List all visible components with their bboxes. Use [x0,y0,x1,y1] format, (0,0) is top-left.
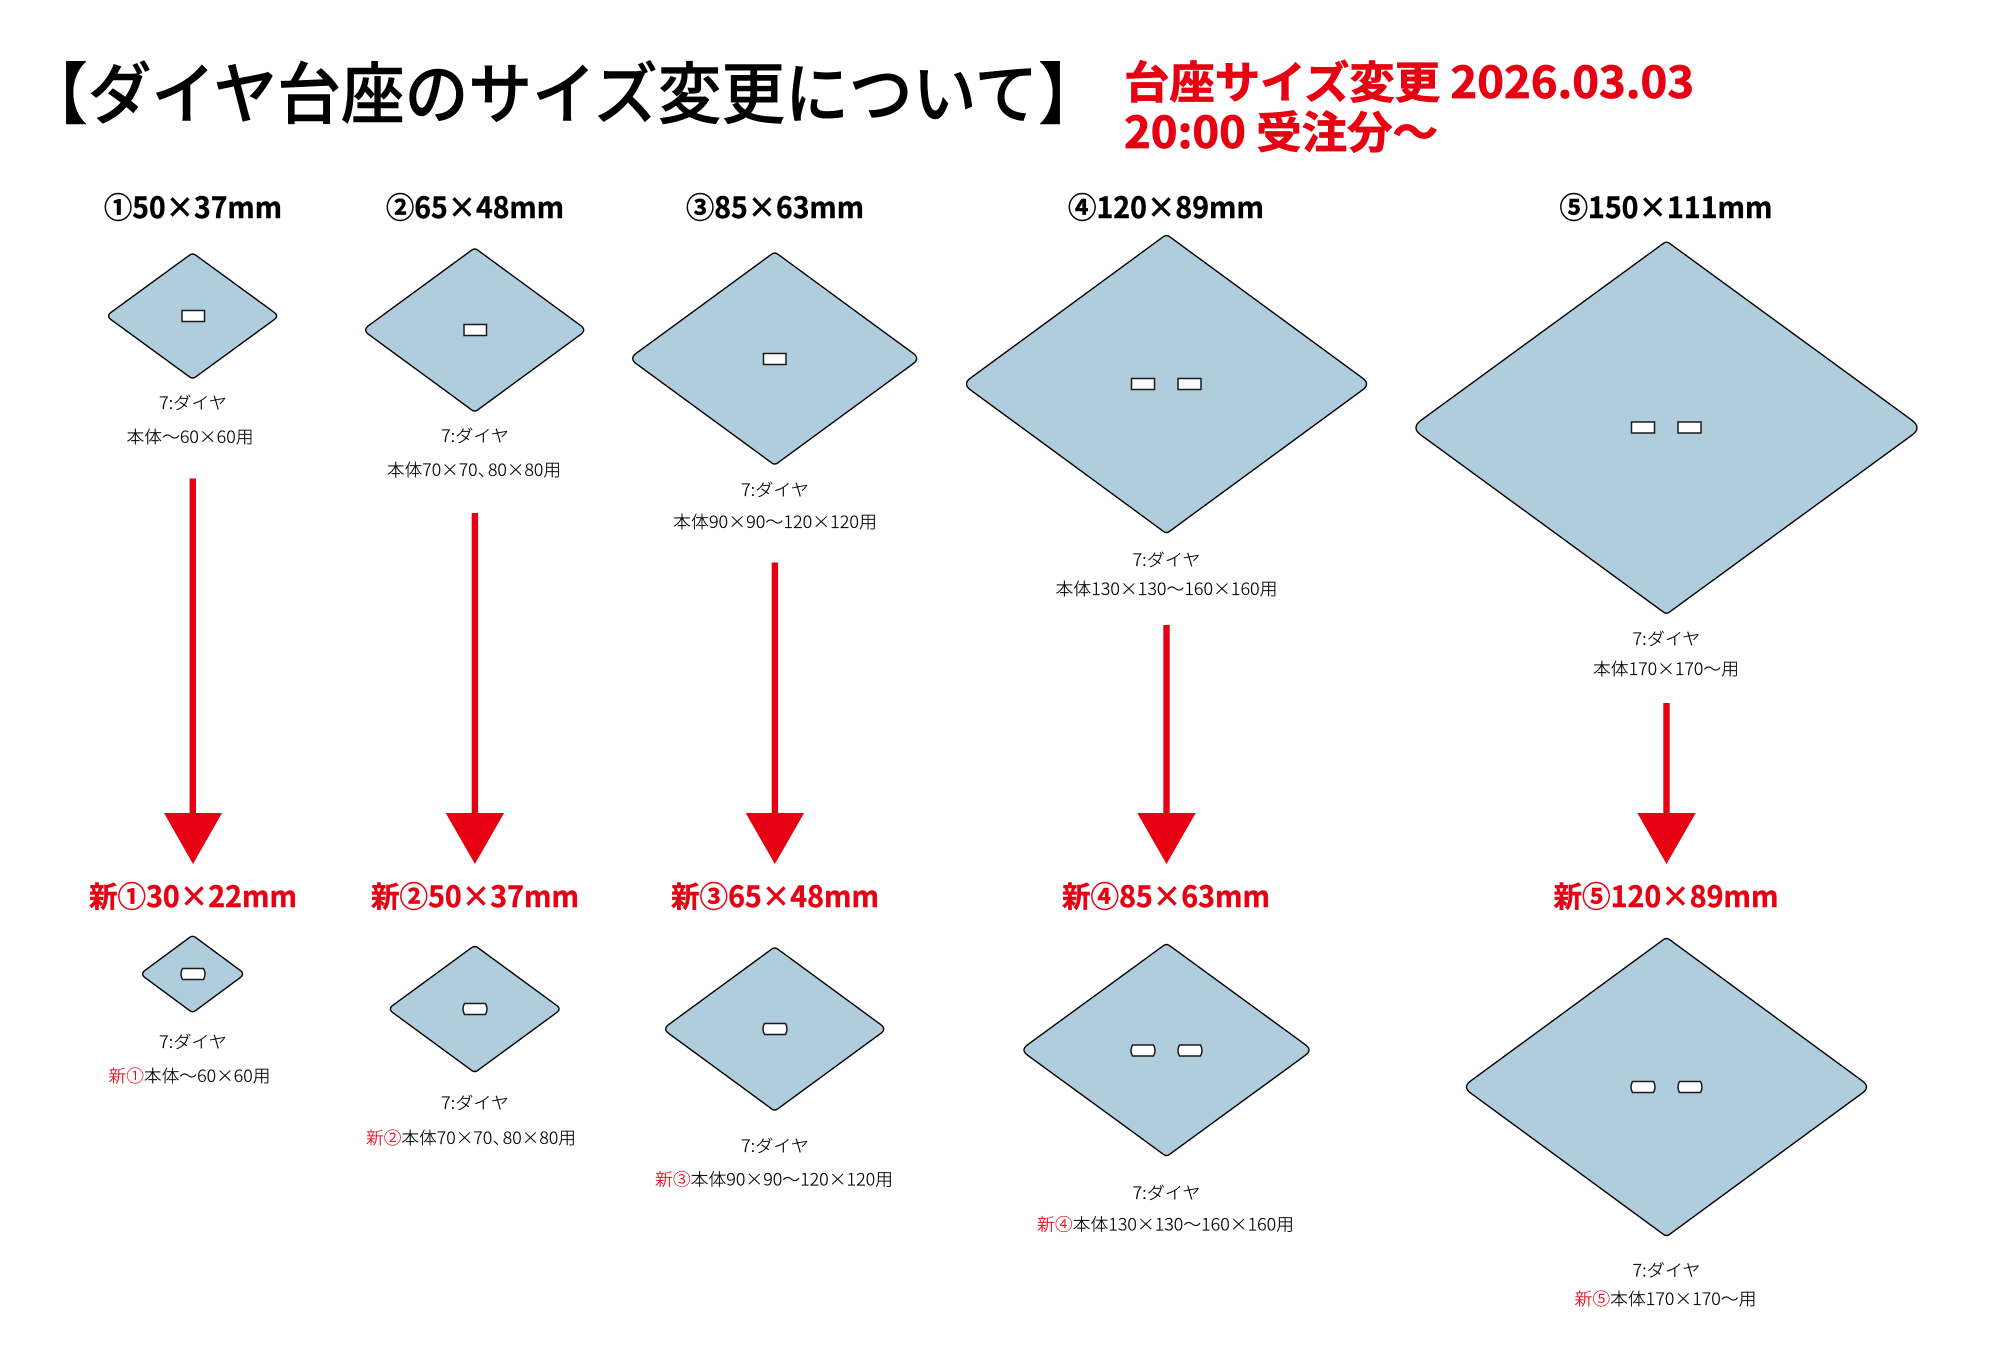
arrow 5 [1637,703,1696,864]
slot [181,968,205,980]
diamond base [966,236,1366,532]
heading: ④120×89mm [1068,185,1264,227]
diamond base [666,948,884,1110]
panel: new size 5 [1466,874,1866,1310]
label: 7:ダイヤ [1632,625,1700,650]
heading: 新①30×22mm [89,874,297,916]
diamond base [143,936,243,1012]
arrow 3 [746,562,804,864]
diamond base [366,249,584,411]
panel: new size 2 [366,874,579,1149]
label: 7:ダイヤ [441,1089,509,1114]
diamond base [1024,944,1309,1155]
slot [764,354,786,364]
heading: ①50×37mm [104,185,282,227]
slots [1131,1045,1202,1056]
label: 7:ダイヤ [741,476,809,501]
diamond base [390,946,559,1072]
panel: new size 4 [1024,874,1309,1236]
slot [182,310,204,322]
notice: effective date [1124,47,1694,161]
label: 7:ダイヤ [1632,1256,1700,1282]
size note: 新①本体～60×60用 [108,1062,270,1087]
heading: ⑤150×111mm [1560,185,1772,227]
label: 7:ダイヤ [741,1132,809,1157]
arrow 4 [1137,625,1196,864]
label: 7:ダイヤ [159,1028,227,1053]
size note: 本体～60×60用 [126,423,254,448]
size note: 新⑤本体170×170～用 [1574,1285,1756,1310]
size note: 本体70×70、80×80用 [387,456,561,481]
slot [763,1024,787,1034]
diamond base [109,254,277,378]
arrow 2 [446,513,504,864]
heading: 新⑤120×89mm [1554,874,1778,916]
label: 7:ダイヤ [1132,1179,1200,1204]
panel: current size 2 [366,185,584,481]
size note: 新③本体90×90～120×120用 [655,1166,893,1190]
slot [464,324,486,336]
slots [1631,1082,1702,1092]
panel: current size 5 [1416,185,1917,680]
title: 【ダイヤ台座のサイズ変更について】 [24,41,1102,138]
label: 7:ダイヤ [441,422,509,447]
slots [1632,422,1701,433]
diamond base [633,253,917,464]
panel: new size 3 [655,874,893,1190]
heading: 新③65×48mm [671,874,879,916]
diamond base [1416,242,1917,613]
heading: ③85×63mm [686,185,864,227]
slot [463,1004,487,1014]
size note: 本体90×90～120×120用 [673,508,877,533]
label: 7:ダイヤ [1132,546,1200,571]
panel: new size 1 [89,874,297,1087]
size note: 本体170×170～用 [1593,655,1739,680]
size note: 新②本体70×70、80×80用 [366,1124,576,1149]
panel: current size 4 [966,185,1366,600]
panel: current size 1 [104,185,282,448]
heading: ②65×48mm [386,185,564,227]
diamond base [1466,938,1866,1235]
notice: effective date: 20:00 受注分～ [1124,97,1438,161]
label: 7:ダイヤ [159,389,227,414]
panel: current size 3 [633,185,917,533]
size note: 新④本体130×130～160×160用 [1037,1210,1294,1236]
arrow 1 [164,478,222,864]
size note: 本体130×130～160×160用 [1056,575,1278,600]
slots [1132,378,1201,390]
heading: 新④85×63mm [1062,874,1270,916]
notice: effective date: 台座サイズ変更 2026.03.03 [1124,47,1694,111]
heading: 新②50×37mm [371,874,579,916]
